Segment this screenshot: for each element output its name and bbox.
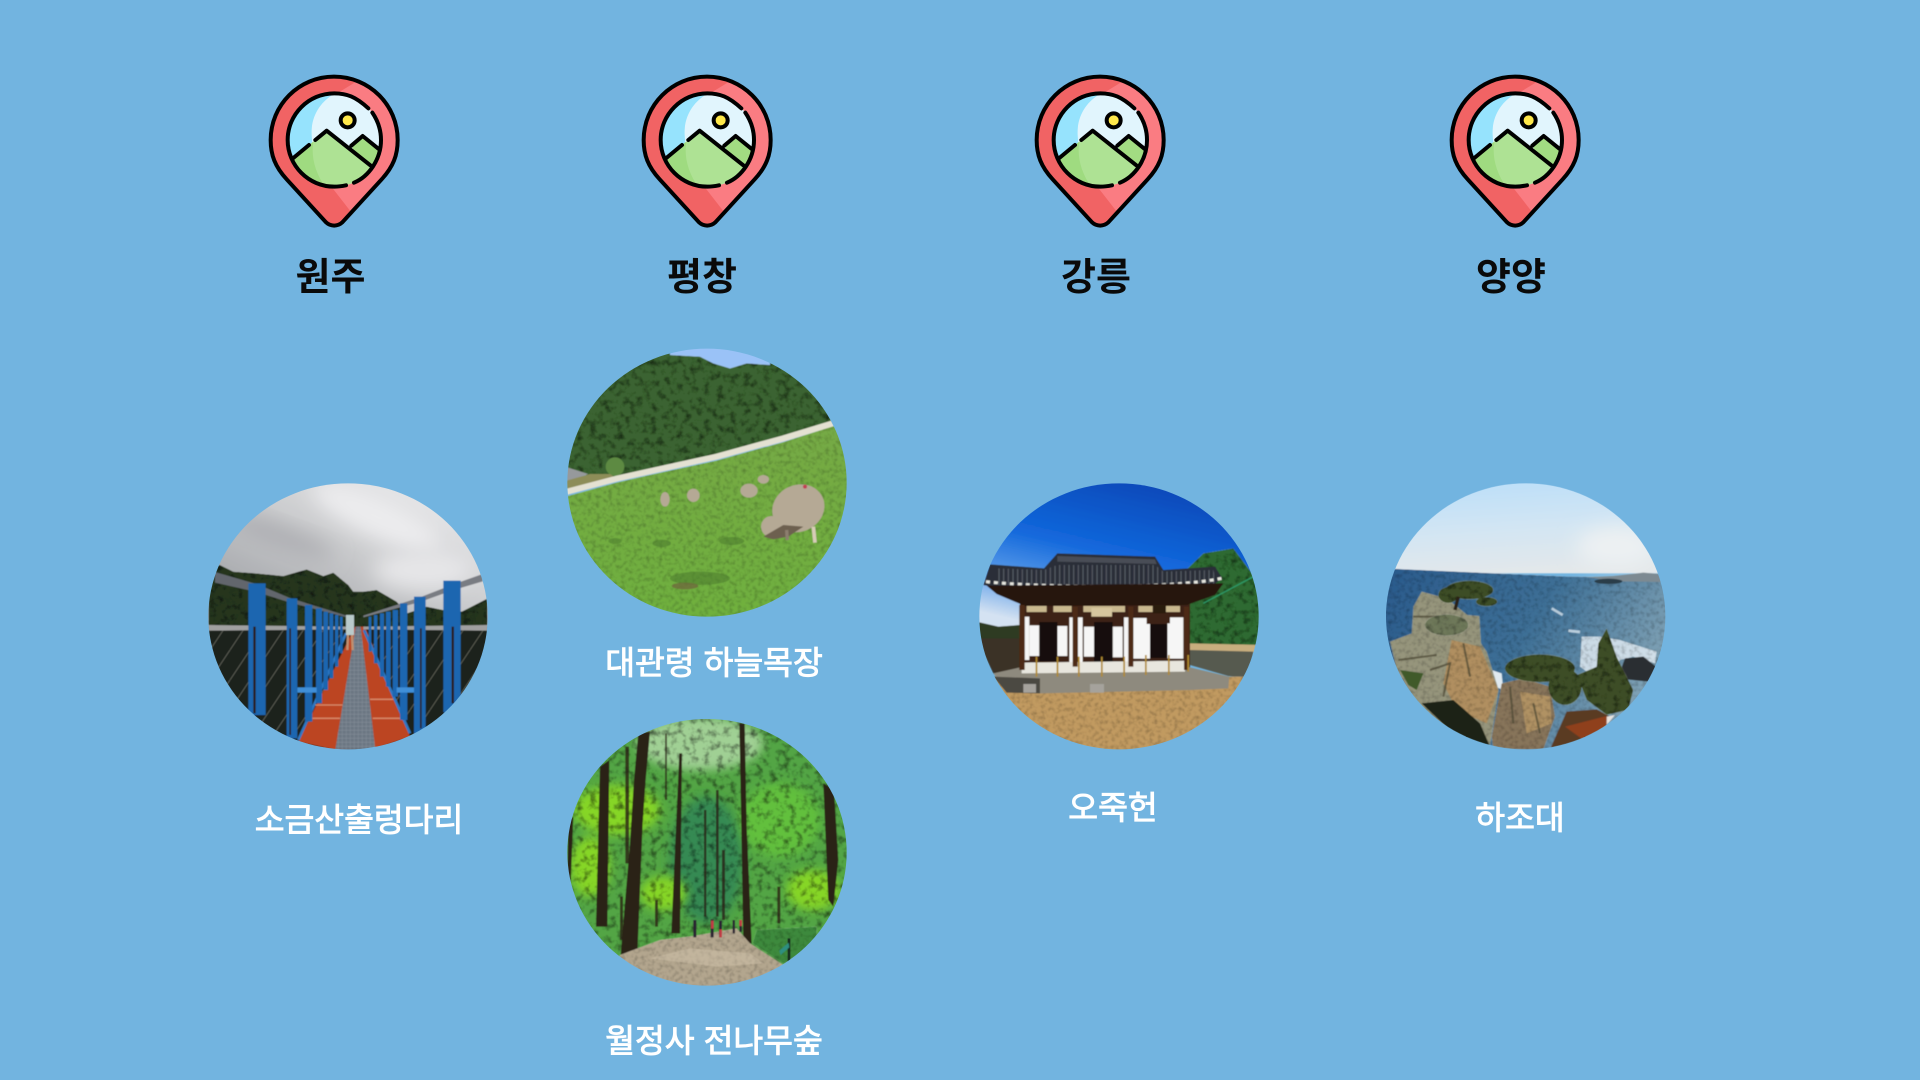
photo: Woljeongsa fir forest xyxy=(563,717,853,990)
icon: map pin for Gangneung xyxy=(1037,77,1169,226)
photo: Ojukheon house xyxy=(977,480,1263,753)
heading: Yangyang: 양양 xyxy=(1476,257,1546,299)
heading: Wonju: 원주 xyxy=(296,257,365,299)
photo: Hajodae coast xyxy=(1383,480,1670,753)
label: Sogeumsan bridge: 소금산출렁다리 xyxy=(255,802,463,838)
photo: Daegwallyeong sky ranch xyxy=(563,347,850,620)
label: Hajodae: 하조대 xyxy=(1475,800,1565,836)
photo: Sogeumsan suspension bridge xyxy=(207,469,490,750)
label: Daegwallyeong sky ranch: 대관령 하늘목장 xyxy=(605,645,823,681)
heading: Gangneung: 강릉 xyxy=(1061,257,1131,299)
icon: map pin for Wonju xyxy=(271,77,403,226)
icon: map pin for Pyeongchang xyxy=(644,77,776,226)
label: Ojukheon: 오죽헌 xyxy=(1068,790,1158,826)
icon: map pin for Yangyang xyxy=(1452,77,1584,226)
label: Woljeongsa fir forest: 월정사 전나무숲 xyxy=(605,1023,823,1059)
heading: Pyeongchang: 평창 xyxy=(667,257,737,299)
